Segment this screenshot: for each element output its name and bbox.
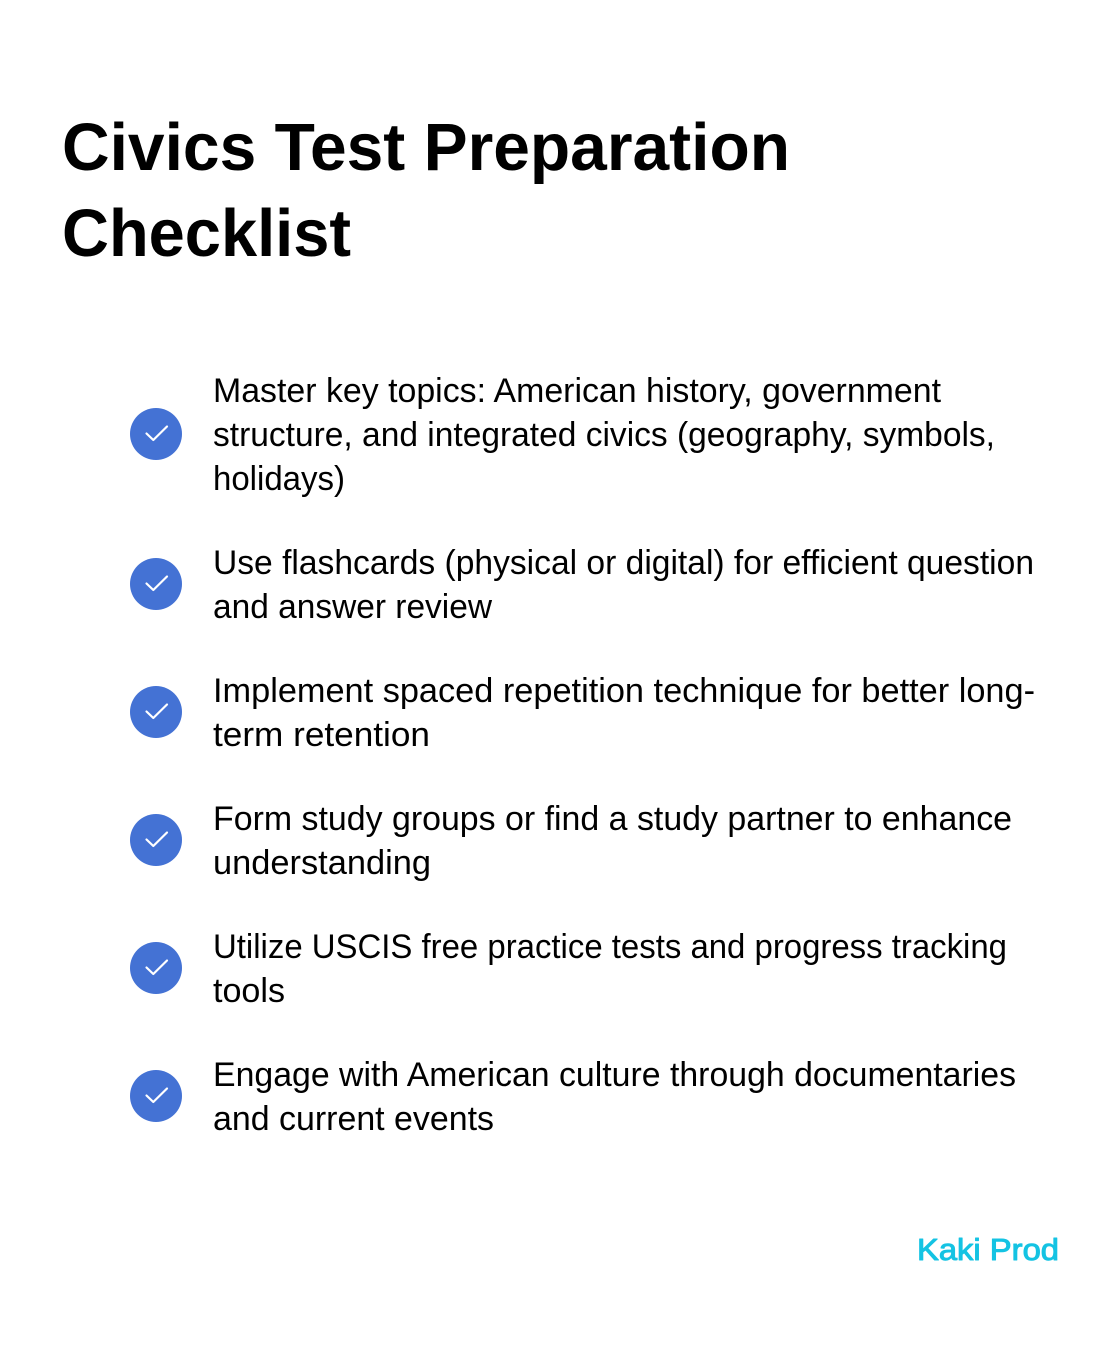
- icon: check 1: [130, 408, 182, 460]
- text: item 1: holidays): [213, 460, 345, 498]
- text: item 5: Utilize USCIS free practice tests and progress tracking: [213, 928, 1007, 966]
- text: item 4: understanding: [213, 844, 431, 882]
- text: item 2: and answer review: [213, 588, 492, 626]
- title: [62, 110, 790, 271]
- text: item 5: tools: [213, 972, 285, 1010]
- text: item 4: [213, 800, 1012, 882]
- item 4: [130, 800, 1012, 882]
- text: item 1: [213, 372, 995, 498]
- icon: check 2: [130, 558, 182, 610]
- text: item 3: Implement spaced repetition technique for better long-: [213, 672, 1035, 710]
- logo: Kaki Prod: Kaki Prod: [917, 1232, 1059, 1267]
- icon: check 4: [130, 814, 182, 866]
- text: item 6: and current events: [213, 1100, 494, 1138]
- item 6: [130, 1056, 1016, 1138]
- text: item 3: term retention: [213, 716, 430, 754]
- title: Checklist: [62, 196, 351, 271]
- text: item 2: [213, 544, 1034, 626]
- item 5: [130, 928, 1007, 1010]
- checklist: [130, 372, 1035, 1138]
- text: item 1: Master key topics: American history, government: [213, 372, 941, 410]
- text: item 3: [213, 672, 1035, 754]
- icon: check 5: [130, 942, 182, 994]
- text: item 1: structure, and integrated civics (geography, symbols,: [213, 416, 995, 454]
- icon: check 3: [130, 686, 182, 738]
- item 3: [130, 672, 1035, 754]
- text: item 4: Form study groups or find a study partner to enhance: [213, 800, 1012, 838]
- item 2: [130, 544, 1034, 626]
- title: Civics Test Preparation: [62, 110, 790, 185]
- item 1: [130, 372, 995, 498]
- text: item 5: [213, 928, 1007, 1010]
- text: item 2: Use flashcards (physical or digital) for efficient question: [213, 544, 1034, 582]
- text: item 6: Engage with American culture through documentaries: [213, 1056, 1016, 1094]
- icon: check 6: [130, 1070, 182, 1122]
- text: item 6: [213, 1056, 1016, 1138]
